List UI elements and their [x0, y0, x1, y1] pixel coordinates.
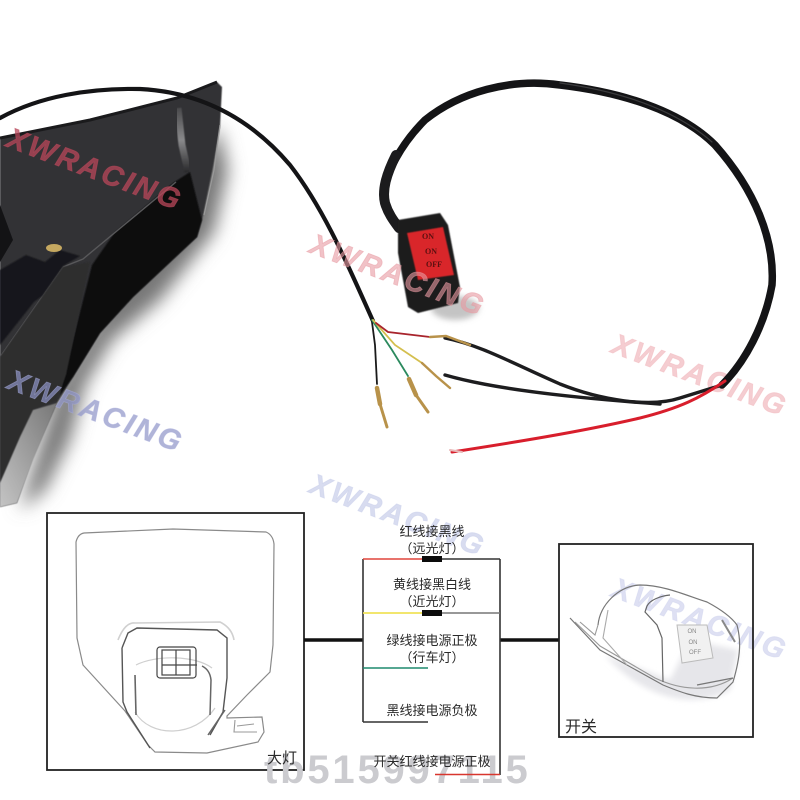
terminal: green wire — [409, 379, 416, 395]
brass pin — [46, 244, 62, 252]
terminal blade: green wire — [416, 395, 428, 412]
headlight body — [0, 82, 222, 507]
main cable from headlight — [0, 89, 373, 321]
soft shadow — [605, 640, 738, 700]
switch button: OFF — [689, 650, 701, 656]
headlight label: 大灯 — [267, 750, 297, 767]
headlight shadow — [20, 125, 228, 510]
panel frame — [47, 513, 304, 770]
label row 1b: （远光灯） — [399, 541, 465, 556]
headlight photo — [0, 82, 228, 510]
watermark: XWRACING marks: XWRACING — [606, 328, 792, 423]
switch button — [677, 625, 713, 663]
inner lens frame — [122, 628, 227, 748]
left lens fragment — [0, 403, 57, 507]
switch body — [398, 213, 460, 313]
label row 1: 红线接黑线 — [399, 524, 465, 539]
mounting tab slot — [234, 720, 257, 732]
loose wires — [372, 320, 725, 452]
left dark recess — [0, 205, 13, 262]
switch red button — [407, 227, 454, 280]
row 2 wire — [363, 610, 500, 616]
switch lower cable mark — [697, 678, 733, 685]
switch outline — [645, 595, 670, 682]
row 5 wire — [435, 774, 500, 776]
panel frame — [559, 544, 753, 737]
switch button: ON — [688, 640, 698, 646]
label row 2: 黄线接黑白线 — [393, 577, 471, 592]
watermark: XWRACING marks: XWRACING — [606, 572, 792, 667]
terminal blade: black wire — [380, 404, 387, 427]
switch label: 开关 — [565, 718, 597, 736]
thick connector right — [500, 638, 559, 642]
store watermark: tb515997115 — [264, 748, 531, 792]
wiring schematic — [363, 524, 500, 775]
red wire — [376, 323, 430, 337]
thick connector left — [304, 638, 363, 642]
top dark rim — [0, 82, 217, 138]
switch labels — [422, 232, 442, 269]
right bus line — [499, 559, 501, 775]
light edge highlight — [178, 108, 188, 172]
black wire lower — [445, 375, 660, 404]
watermark: XWRACING marks: XWRACING — [304, 468, 490, 563]
headlight outline — [76, 529, 274, 753]
panel: switch diagram — [559, 544, 753, 737]
outer lens halo — [118, 622, 234, 640]
yellow wire — [373, 320, 422, 363]
cable inner side — [603, 610, 627, 665]
dark lower flank — [60, 172, 202, 395]
switch cable outline — [570, 585, 740, 698]
terminal: red wire — [430, 336, 470, 345]
left bus line — [362, 559, 364, 722]
left inner wire — [135, 675, 136, 715]
switch cable mark — [722, 620, 735, 642]
switch labels: ON — [422, 232, 434, 241]
label row 5: 开关红线接电源正极 — [373, 754, 491, 769]
harness thick boot near switch — [384, 155, 399, 228]
watermark: XWRACING marks — [1, 122, 792, 667]
green wire — [372, 320, 408, 376]
black wire upper — [445, 338, 722, 402]
cable tail inner — [575, 622, 733, 688]
inner bulb housing — [0, 250, 80, 345]
watermark over switch: XWRACING — [304, 228, 490, 323]
harness highlight — [560, 83, 712, 142]
row 4 wire — [363, 721, 428, 723]
terminal: yellow wire — [422, 363, 450, 388]
label row 2b: （近光灯） — [399, 594, 465, 609]
switch labels: OFF — [426, 260, 442, 269]
terminal: black wire — [377, 388, 380, 404]
brass terminals — [377, 336, 470, 427]
right edge highlight — [204, 125, 220, 215]
switch labels: ON — [425, 247, 437, 256]
row 1 wire — [363, 556, 500, 562]
white wire tip — [450, 450, 462, 452]
label row 3: 绿线接电源正极 — [386, 633, 478, 648]
row 3 wire — [363, 667, 428, 669]
bulb socket — [157, 647, 197, 678]
inner panel crease — [0, 182, 176, 357]
red power wire — [452, 381, 725, 452]
switch — [304, 213, 490, 323]
switch harness loop — [383, 83, 772, 385]
harness cable — [383, 83, 772, 385]
switch button: ON — [688, 629, 696, 635]
lens arc — [135, 658, 215, 731]
switch shadow — [431, 296, 479, 320]
black terminal wire — [372, 322, 377, 384]
right inner wire — [202, 666, 225, 735]
watermark: XWRACING marks: XWRACING — [2, 364, 188, 459]
panel: headlight diagram — [47, 513, 304, 770]
lower gray facet — [0, 262, 90, 483]
label row 4: 黑线接电源负极 — [386, 703, 478, 718]
label row 3b: （行车灯） — [399, 650, 465, 665]
watermark: XWRACING marks: XWRACING — [1, 122, 187, 217]
